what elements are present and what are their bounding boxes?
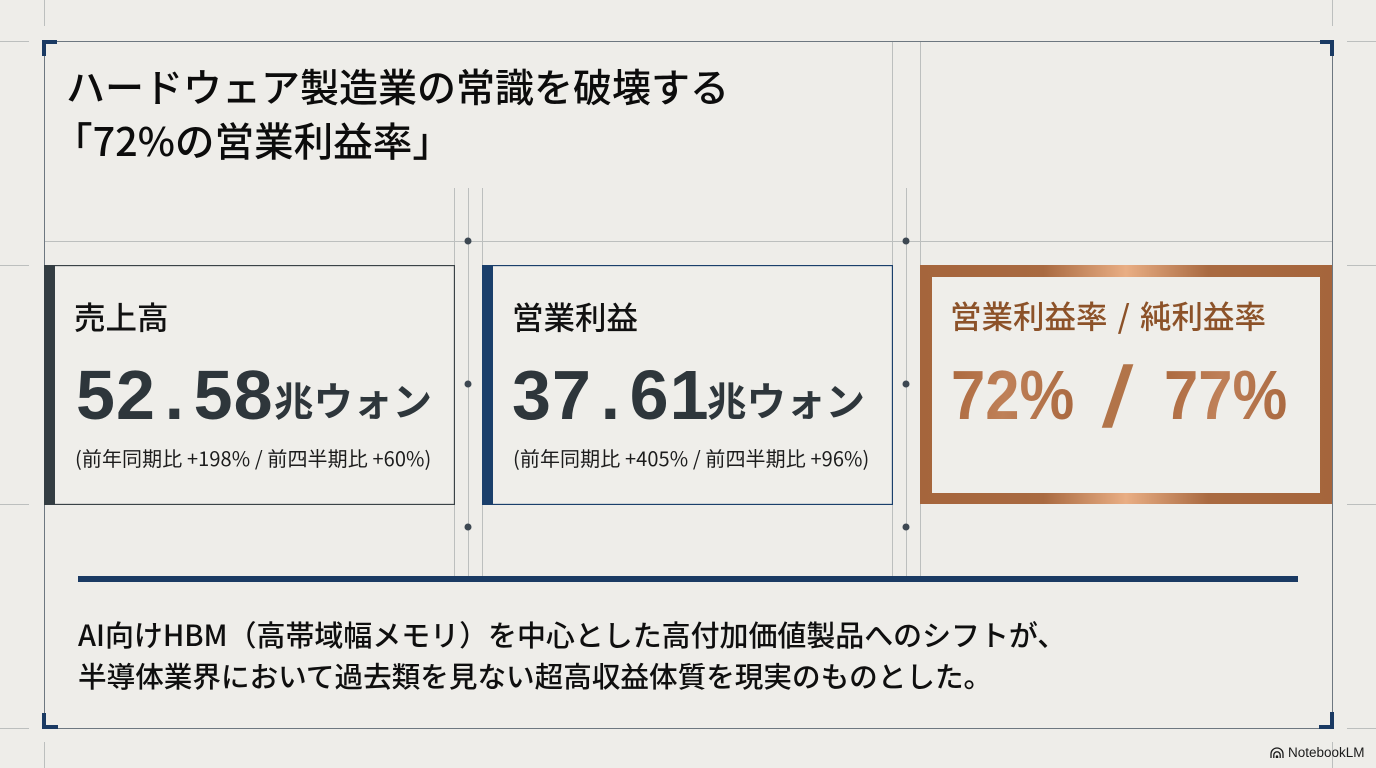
icon: logo arcs	[1270, 747, 1284, 758]
comparison: operating profit: (前年同期比 +405% / 前四半期比 +96%)	[513, 443, 869, 472]
number: revenue: 52.58	[76, 356, 274, 434]
value: margins	[951, 350, 1287, 444]
summary text	[78, 613, 1066, 696]
title line 2: 「72%の営業利益率」	[53, 111, 452, 168]
panel: margins	[920, 265, 1332, 504]
comparison: revenue: (前年同期比 +198% / 前四半期比 +60%)	[75, 443, 431, 472]
value: revenue	[76, 356, 432, 434]
panel accent bar	[44, 265, 55, 505]
slash: /	[1103, 350, 1132, 444]
number: operating profit: 37.61	[512, 356, 710, 434]
title	[53, 58, 729, 168]
label: operating profit: 営業利益	[512, 293, 638, 339]
label: revenue: 売上高	[74, 293, 169, 339]
NotebookLM logo	[1270, 745, 1365, 760]
number: operating margin: 72%	[951, 356, 1074, 434]
panel: operating profit	[482, 265, 893, 505]
number: net margin: 77%	[1164, 356, 1287, 434]
label: margins: 営業利益率 / 純利益率	[950, 292, 1266, 338]
title line 1: ハードウェア製造業の常識を破壊する	[66, 58, 729, 114]
panel accent bar	[482, 265, 493, 505]
wordmark: NotebookLM	[1288, 745, 1365, 760]
panel inner	[932, 277, 1320, 493]
unit: operating profit: 兆ウォン	[707, 371, 865, 428]
unit: revenue: 兆ウォン	[274, 371, 432, 428]
summary line 1: AI向けHBM（高帯域幅メモリ）を中心とした高付加価値製品へのシフトが、	[78, 613, 1066, 655]
panel: revenue	[44, 265, 455, 505]
summary line 2: 半導体業界において過去類を見ない超高収益体質を現実のものとした。	[78, 655, 992, 696]
value: operating profit	[512, 356, 865, 434]
divider rule	[78, 576, 1298, 582]
